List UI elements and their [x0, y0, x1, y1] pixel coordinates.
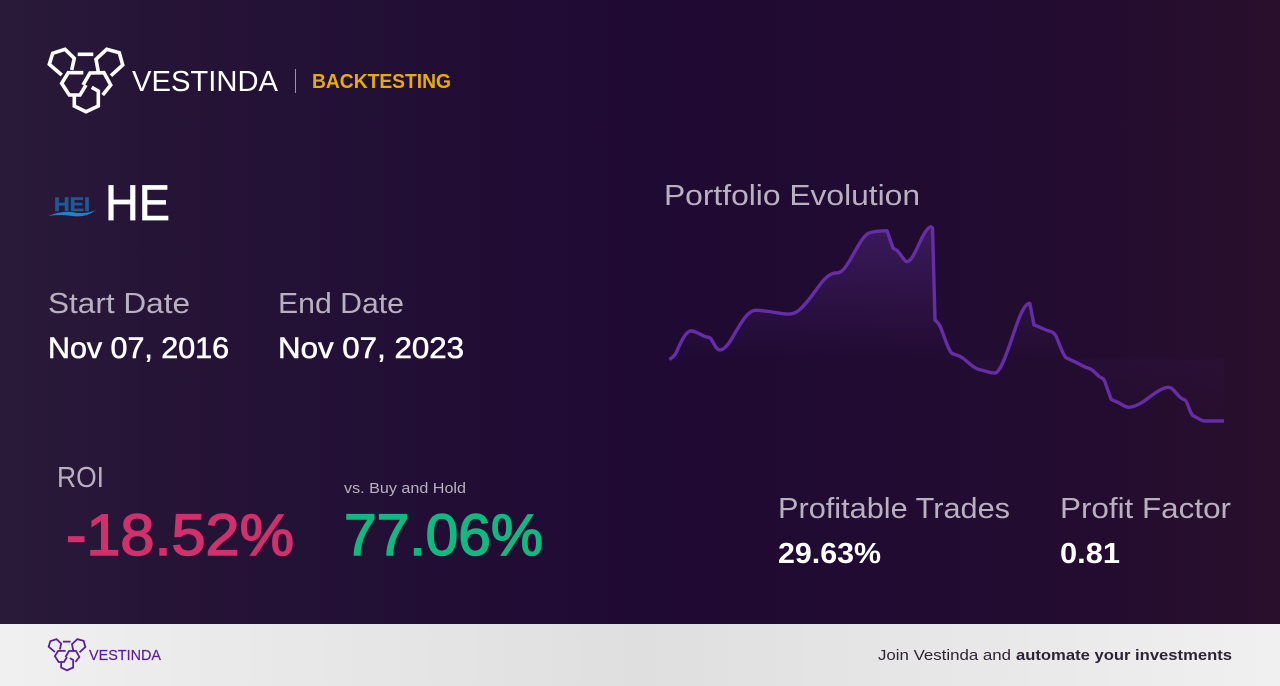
metric: vs. Buy and Hold: vs. Buy and Hold	[344, 480, 466, 497]
icon: Vestinda logo	[49, 49, 123, 112]
end date	[278, 288, 464, 365]
icon: footer logo	[49, 639, 85, 670]
chart area fill	[669, 227, 1224, 421]
end date: Nov 07, 2023	[278, 332, 464, 365]
metric: profitable trades	[778, 493, 1010, 570]
portfolio line	[669, 227, 1224, 421]
metric: profitable trades: 29.63%	[778, 538, 881, 570]
ticker heading	[48, 175, 170, 231]
metric: ROI: -18.52%	[66, 503, 294, 568]
start date: Nov 07, 2016	[48, 332, 229, 365]
icon: HEI company logo: HEI	[54, 194, 90, 216]
metric: vs. Buy and Hold: 77.06%	[344, 503, 543, 568]
metric: profit factor: 0.81	[1060, 538, 1120, 570]
header brand	[49, 49, 451, 112]
chart title: Portfolio Evolution	[664, 180, 920, 212]
wordmark: VESTINDA	[132, 66, 279, 98]
metric: profit factor	[1060, 493, 1231, 570]
section tag: BACKTESTING	[312, 71, 451, 93]
metric: profit factor: Profit Factor	[1060, 493, 1231, 525]
footer bar	[0, 624, 1280, 686]
metric: ROI: ROI	[57, 462, 104, 494]
ticker: HE	[105, 175, 170, 231]
call to action: Join Vestinda and	[878, 647, 1011, 664]
footer wordmark: VESTINDA	[89, 647, 161, 664]
metric: ROI	[57, 462, 294, 568]
metric: profitable trades: Profitable Trades	[778, 493, 1010, 525]
start date: Start Date	[48, 288, 190, 320]
call to action emphasis: automate your investments	[1016, 647, 1232, 664]
start date	[48, 288, 229, 365]
chart: portfolio evolution	[664, 180, 1224, 421]
end date: End Date	[278, 288, 404, 320]
